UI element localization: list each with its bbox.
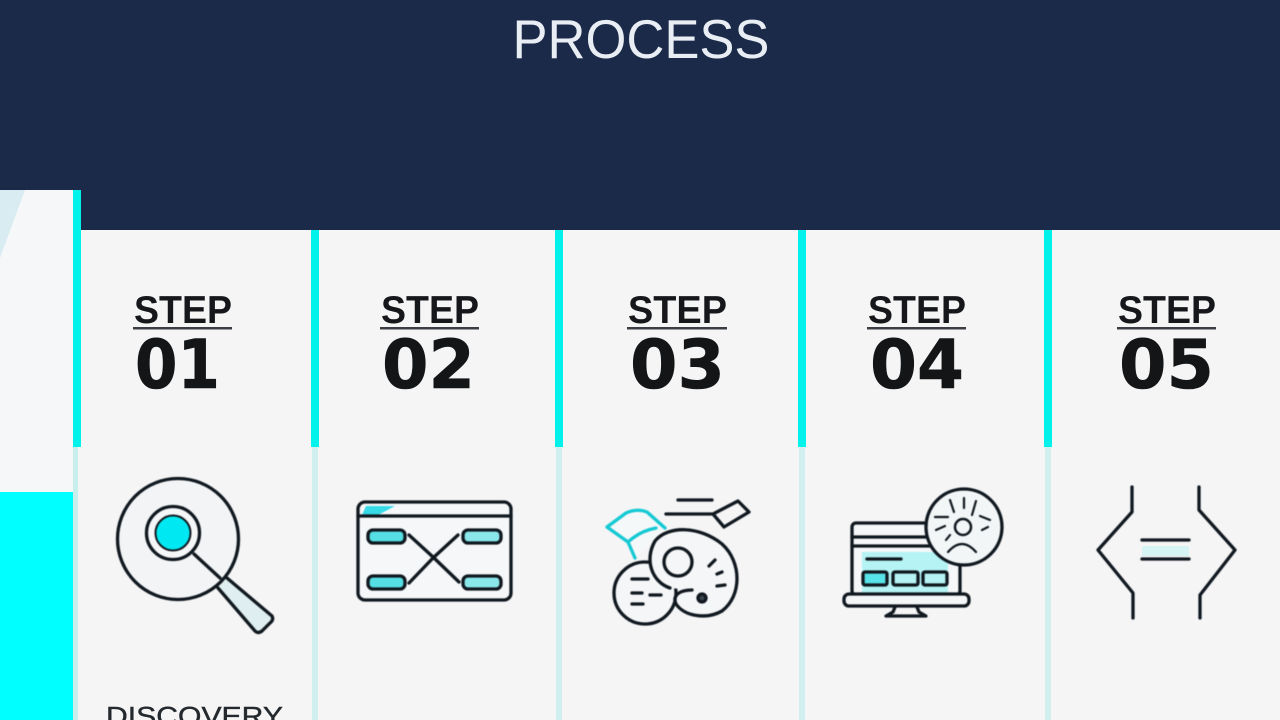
panel: steps background bbox=[77, 230, 1280, 720]
header band bbox=[0, 0, 1280, 230]
step 01 heading bbox=[133, 289, 232, 405]
step 02 heading: STEP bbox=[381, 289, 479, 332]
step 03 heading bbox=[627, 289, 727, 405]
step 01 heading: STEP bbox=[134, 289, 232, 332]
step 05 heading: STEP bbox=[1118, 289, 1216, 332]
step 03 heading: 03 bbox=[630, 326, 725, 405]
icon: laptop with gear badge bbox=[844, 489, 1002, 616]
icon: flow diagram window bbox=[358, 502, 511, 600]
step 05 heading bbox=[1117, 289, 1216, 405]
step 03 heading: STEP bbox=[628, 289, 727, 332]
column separators bbox=[73, 190, 1052, 720]
icon: code brackets bbox=[1098, 487, 1235, 618]
step 04 heading bbox=[867, 289, 966, 405]
panel: left side strip bbox=[0, 190, 78, 720]
title: PROCESS bbox=[512, 8, 770, 70]
icon: palette and brush bbox=[607, 500, 749, 624]
icon: magnifying glass bbox=[118, 478, 273, 632]
step 04 heading: STEP bbox=[868, 289, 966, 332]
step 04 heading: 04 bbox=[870, 326, 964, 405]
step 01 heading: 01 bbox=[135, 326, 220, 405]
step 02 heading: 02 bbox=[382, 326, 475, 405]
step 02 heading bbox=[380, 289, 479, 405]
step 05 heading: 05 bbox=[1119, 326, 1214, 405]
